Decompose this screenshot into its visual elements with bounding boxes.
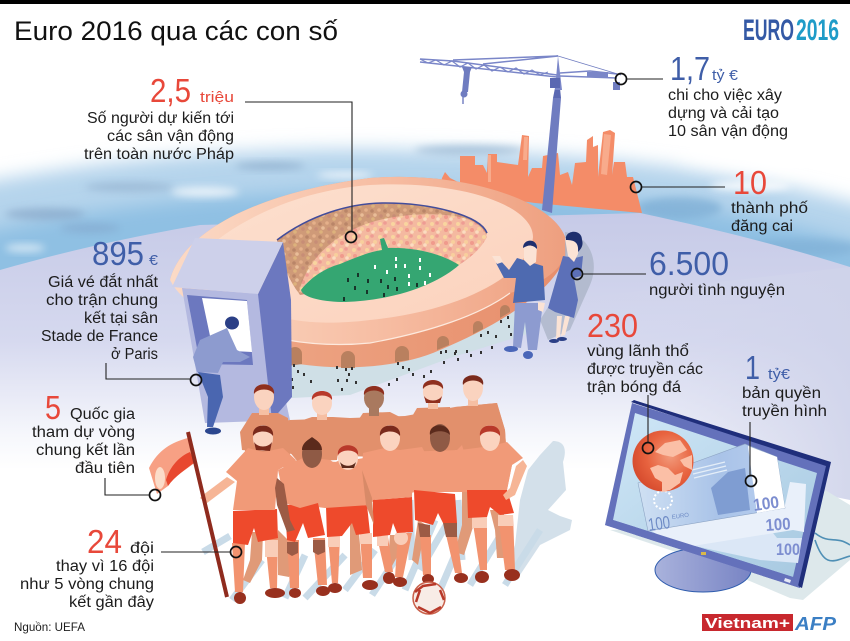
city skyline	[440, 130, 642, 213]
monitor frame	[605, 403, 830, 588]
back player 1	[240, 384, 290, 455]
callout: 5 nations: Quốc gia	[70, 406, 135, 423]
stadium outer wall	[170, 177, 567, 367]
stadium deck	[170, 177, 567, 344]
callout: 1 billion euro: tỷ€	[768, 366, 791, 383]
logo: Vietnam+ AFP	[702, 614, 837, 634]
monitor shadow	[610, 490, 850, 600]
arches	[288, 305, 510, 368]
callout: 895 euro	[41, 235, 159, 363]
logo: Euro 2016: EURO	[743, 14, 794, 47]
leader lines and markers	[105, 74, 756, 558]
callout: 1,7 billion euro: 10 sân vận động	[668, 123, 788, 140]
callout: 24 teams: kết gần đây	[69, 594, 154, 611]
crowd lower tier	[299, 214, 487, 300]
monitor power light	[701, 552, 706, 555]
banknotes: EURO	[671, 513, 690, 521]
title: Euro 2016 qua các con số	[14, 16, 338, 46]
callout: 1,7 billion euro: dựng và cải tạo	[668, 105, 779, 122]
callout: 10 cities	[731, 164, 808, 235]
cables	[815, 533, 850, 561]
callout: 1 billion euro	[742, 349, 827, 420]
man	[492, 241, 545, 359]
stadium inner terrace	[190, 184, 533, 323]
callout: 1,7 billion euro: tỷ €	[712, 67, 739, 84]
volunteers	[492, 232, 594, 359]
monitor stand	[655, 548, 751, 592]
callout: 6.500 volunteers	[649, 245, 785, 299]
callout: 2,5 million: 2,5	[150, 72, 191, 109]
monitor frame bottom bar	[605, 520, 800, 588]
note 1	[638, 444, 785, 531]
callout: 895 euro: Giá vé đắt nhất	[48, 274, 159, 291]
monitor	[605, 400, 850, 600]
flag	[149, 432, 227, 597]
back-row legs	[243, 458, 513, 583]
callout: 230 territories: vùng lãnh thổ	[587, 343, 689, 360]
front player 3	[323, 445, 378, 593]
monitor button	[784, 578, 791, 583]
front player 4	[362, 425, 426, 587]
back row shirts mass	[245, 403, 507, 462]
callout: 5 nations: tham dự vòng	[32, 424, 135, 441]
callout: 895 euro: €	[149, 252, 159, 269]
callout: 1,7 billion euro	[668, 50, 788, 140]
callout: 2,5 million	[84, 72, 234, 163]
callout: 1 billion euro: 1	[745, 349, 760, 386]
source: Nguồn: UEFA	[14, 620, 85, 634]
note 3	[690, 533, 802, 563]
front player 1	[200, 425, 296, 604]
callout: 230 territories: trận bóng đá	[587, 379, 681, 396]
stadium	[170, 177, 567, 398]
player shadows	[203, 441, 572, 600]
back player 4	[407, 380, 455, 445]
note 2	[650, 482, 806, 548]
logo: Vietnam+ AFP: Vietnam+	[705, 615, 790, 632]
callout: 2,5 million: trên toàn nước Pháp	[84, 146, 234, 163]
booth window	[187, 295, 253, 365]
callout: 2,5 million: Số người dự kiến tới	[87, 110, 234, 127]
callout: 895 euro: 895	[92, 235, 144, 272]
back player 3	[348, 386, 402, 455]
stadium shadow on ground	[290, 310, 540, 398]
background: sky and clouds	[0, 132, 850, 300]
callout: 1,7 billion euro: chi cho việc xây	[668, 87, 782, 104]
callout: 5 nations: đầu tiên	[75, 460, 135, 477]
callout: 6.500 volunteers: người tình nguyện	[649, 282, 785, 299]
crowd leaving the stadium	[291, 316, 512, 391]
callout: 10 cities: 10	[733, 164, 767, 201]
booth side	[258, 242, 292, 420]
callout: 895 euro: Stade de France	[41, 328, 158, 345]
front player 6	[455, 425, 527, 583]
banknotes: 100	[765, 514, 791, 535]
callout: 895 euro: ở Paris	[111, 346, 158, 363]
crane	[420, 56, 621, 213]
callout: 5 nations	[32, 389, 135, 477]
callout: 24 teams: đội	[130, 540, 154, 557]
ball	[413, 582, 445, 614]
callout: 1 billion euro: truyền hình	[742, 403, 827, 420]
callout: 230 territories: 230	[587, 307, 638, 344]
callout: 895 euro: cho trận chung	[46, 292, 158, 309]
pitch	[301, 238, 459, 302]
logo: Vietnam+ AFP: AFP	[794, 614, 837, 634]
top bar	[0, 0, 850, 4]
callout: 10 cities: thành phố	[731, 200, 808, 217]
crowd top edge	[277, 203, 487, 240]
callout: 2,5 million: triệu	[200, 89, 234, 106]
callout: 5 nations: chung kết lần	[36, 442, 135, 459]
woman	[548, 232, 583, 343]
crowd	[277, 203, 487, 295]
ticket booth	[172, 238, 292, 423]
banknotes: 100	[647, 512, 671, 535]
callout: 24 teams: 24	[87, 523, 122, 560]
booth front	[182, 288, 290, 423]
callout: 2,5 million: các sân vận động	[107, 128, 234, 145]
monitor back edge	[631, 400, 831, 588]
woman shadow	[540, 232, 594, 340]
white trim	[287, 293, 510, 344]
callout: 10 cities: đăng cai	[731, 218, 793, 235]
back player 2	[288, 391, 350, 462]
callout: 230 territories: được truyền các	[587, 361, 703, 378]
front row shirts mass	[283, 444, 512, 508]
callout: 24 teams: thay vì 16 đội	[56, 558, 154, 575]
banknotes: 100	[752, 493, 780, 515]
ticket buyer	[193, 316, 250, 434]
callout: 6.500 volunteers: 6.500	[649, 245, 729, 282]
callout: 24 teams	[20, 523, 154, 611]
callout: 1 billion euro: bản quyền	[742, 385, 821, 402]
banknotes	[638, 444, 806, 563]
players on pitch	[374, 257, 431, 286]
monitor screen	[613, 413, 817, 577]
background: globe ground	[0, 213, 850, 641]
back player 5	[455, 375, 507, 460]
callout: 230 territories	[587, 307, 703, 396]
booth roof	[172, 238, 283, 294]
callout: 5 nations: 5	[45, 389, 61, 426]
callout: 24 teams: như 5 vòng chung	[20, 576, 154, 593]
team of players	[200, 375, 527, 604]
front player 2	[275, 437, 345, 598]
globe	[632, 430, 694, 492]
front player 5	[414, 424, 468, 584]
callout: 1,7 billion euro: 1,7	[670, 50, 710, 87]
callout: 895 euro: kết tại sân	[84, 310, 158, 327]
banknotes: 100	[776, 540, 800, 559]
